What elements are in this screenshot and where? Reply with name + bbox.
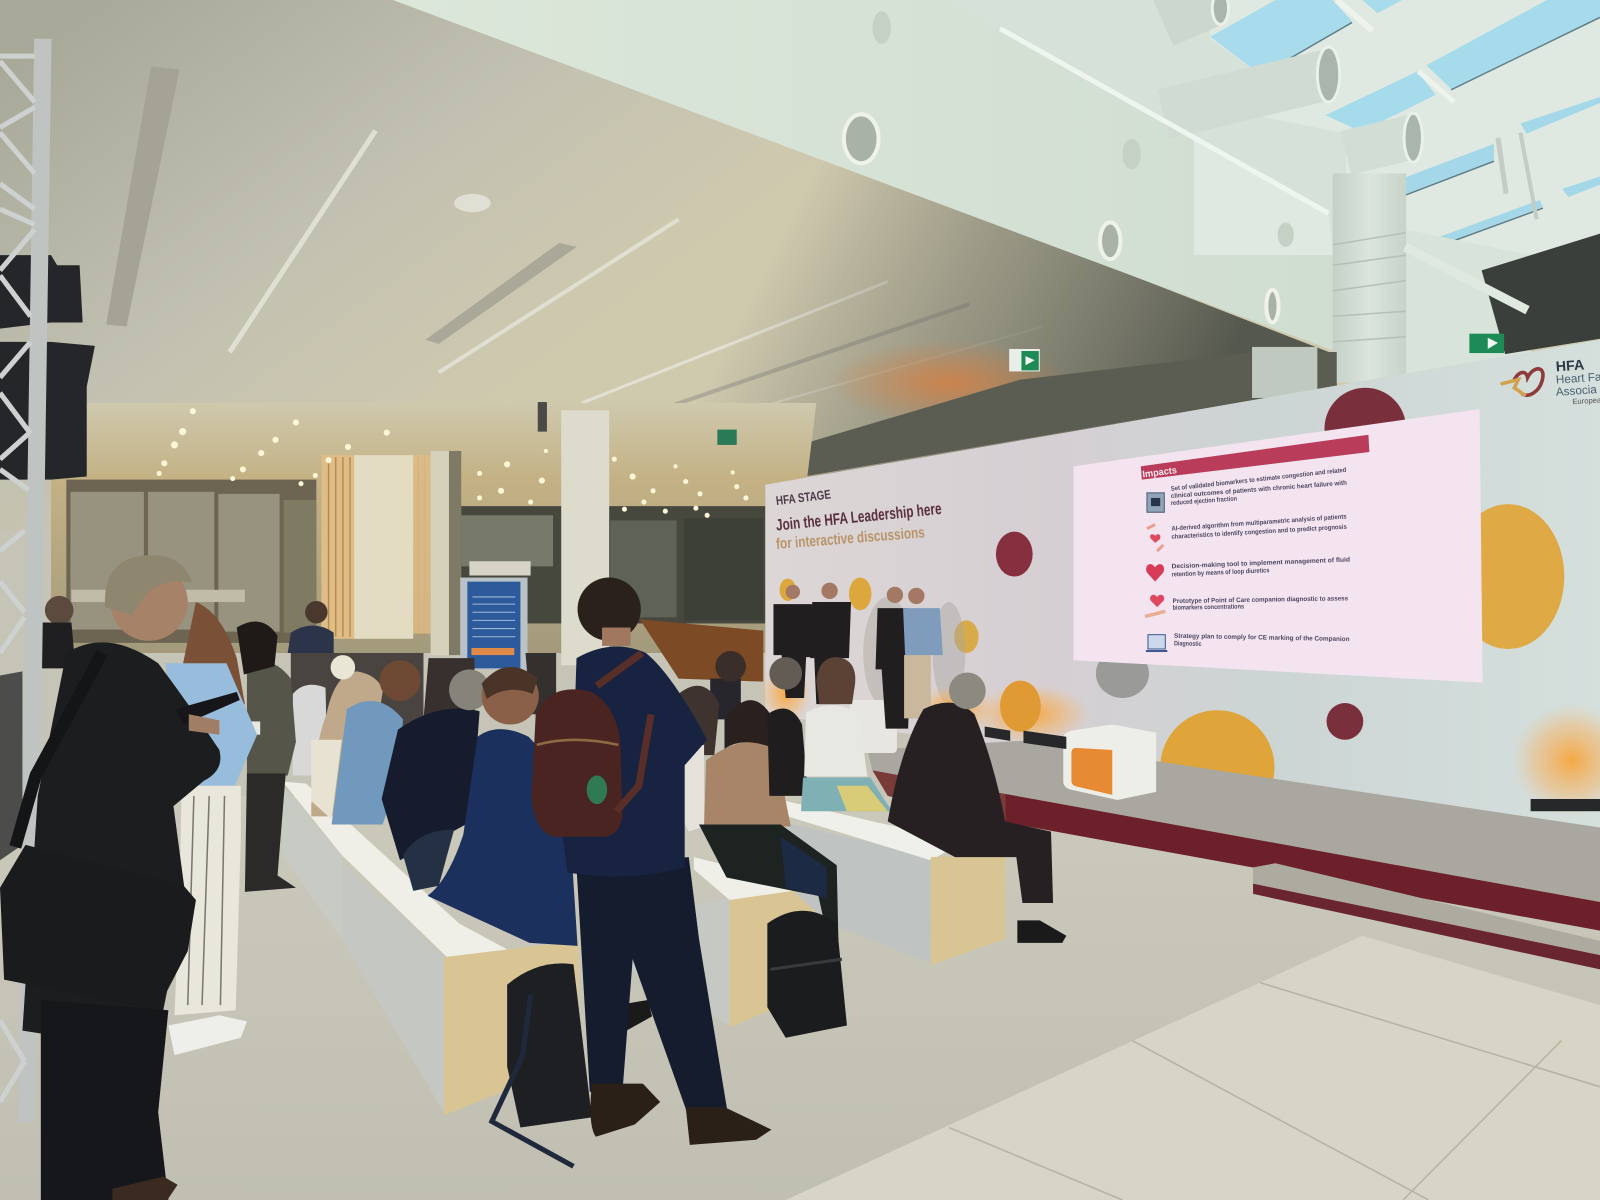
round column	[561, 410, 609, 665]
impacts header bar	[1141, 435, 1369, 480]
shoe	[112, 1177, 178, 1200]
right exit sign	[1469, 334, 1504, 353]
skylight glass and frames	[1194, 0, 1600, 255]
shaded soffit under beam	[571, 153, 1337, 480]
right-side wall and dark roof structure	[1405, 230, 1600, 388]
ventilation ducts	[939, 0, 1422, 383]
foreground man with shoulder bag	[0, 555, 240, 1200]
dark ceiling band above stage	[786, 352, 1337, 480]
head	[105, 555, 192, 641]
brown backpack	[532, 653, 651, 837]
bench 2 side	[628, 898, 730, 1026]
trousers	[577, 857, 728, 1117]
bench 3 wood end	[931, 855, 1005, 965]
bench 1 far side	[283, 786, 342, 940]
impact items text: reduced ejection fraction	[1171, 495, 1237, 507]
logo text	[1555, 357, 1600, 406]
backdrop heading text: for interactive discussions	[776, 524, 925, 553]
ceiling spot lights	[157, 408, 748, 518]
black suit jacket	[22, 642, 220, 1051]
blue info banner	[460, 578, 528, 669]
backdrop heading text: HFA STAGE	[775, 486, 832, 508]
standing woman blue shirt striped trousers	[165, 602, 257, 1055]
stage orange floor glow lights	[760, 663, 1600, 816]
shoes	[590, 1084, 771, 1145]
impact items text: biomarkers concentrations	[1173, 603, 1244, 612]
logo text: HFA	[1555, 357, 1585, 375]
left-edge patterned shirt figure	[0, 671, 22, 860]
seated man dark jacket	[382, 669, 490, 891]
impact items text: Prototype of Point of Care companion diagnostic to assess	[1173, 595, 1349, 605]
impact items text: clinical outcomes of patients with chronic heart failure with	[1171, 480, 1347, 500]
presenters on stage	[773, 583, 943, 729]
standing man with backpack	[532, 578, 771, 1145]
stage platform	[867, 741, 1600, 969]
standing woman grey jacket	[237, 622, 296, 892]
shoulder bag	[0, 653, 196, 1010]
white cube seat with orange opening	[1063, 724, 1156, 800]
seated man light blue shirt	[332, 660, 420, 824]
impact items text: Decision-making tool to implement management of fluid	[1171, 557, 1350, 570]
backpack on floor right	[767, 911, 847, 1038]
white cube seat rear	[850, 700, 897, 753]
impact items text: Diagnostic	[1174, 640, 1202, 648]
bench 2 wood end	[730, 886, 829, 1028]
logo text: Associa	[1555, 383, 1598, 399]
backdrop heading text: Join the HFA Leadership here	[775, 500, 942, 535]
lobby exit sign	[717, 430, 737, 445]
impacts heading: Impacts	[1142, 465, 1178, 481]
impact items text: AI-derived algorithm from multiparametric analysis of patients	[1171, 513, 1347, 533]
impact items text: Strategy plan to comply for CE marking of the Companion	[1174, 633, 1350, 643]
logo heart mark	[1502, 369, 1543, 395]
screen surface	[1073, 409, 1483, 683]
trousers	[41, 1000, 168, 1200]
seated audience	[41, 596, 1066, 957]
security camera	[538, 402, 547, 432]
icon: laptop	[1146, 635, 1167, 652]
truss structure at left	[0, 39, 43, 1122]
truss stage lights	[0, 255, 95, 480]
icon: hands and heart	[1147, 524, 1163, 551]
ceiling slot vents and light lines	[106, 66, 1043, 418]
lobby background	[51, 403, 816, 682]
impact items text: Set of validated biomarkers to estimate congestion and related	[1170, 467, 1347, 493]
bench 1 near side	[342, 862, 444, 1112]
floor	[0, 796, 1600, 1200]
background crowd	[41, 596, 746, 832]
HFA logo	[1502, 357, 1600, 406]
wall spot lamps	[872, 11, 1294, 247]
navy jacket	[559, 647, 707, 877]
bench 1 cushion	[283, 782, 510, 957]
backdrop heading text	[775, 486, 942, 553]
icon: safe box	[1147, 493, 1164, 512]
round wall vents	[844, 114, 1279, 322]
impact items text: retention by means of loop diuretics	[1171, 567, 1270, 579]
exit sign above stage	[1009, 349, 1040, 371]
seated man navy suit	[428, 667, 578, 946]
warm glow on ceiling	[827, 340, 1071, 426]
seated man black suit	[888, 672, 1066, 943]
icon: heart	[1146, 564, 1164, 582]
impact items text	[1170, 467, 1350, 648]
gold circle in glow	[1000, 681, 1041, 732]
bench 2 cushion	[694, 857, 829, 900]
benches	[283, 782, 1005, 1115]
smoke detector	[454, 194, 491, 212]
bench 3 side	[790, 823, 931, 963]
seated woman white top and patterned skirt	[801, 657, 893, 811]
stage light bars	[985, 727, 1600, 811]
seated woman black top	[767, 657, 808, 796]
floor light tiles	[786, 936, 1600, 1200]
hand and phone	[176, 692, 240, 735]
stage backdrop wall	[765, 340, 1600, 828]
impact items text: characteristics to identify congestion and to predict prognosis	[1171, 524, 1347, 541]
backdrop decorative circles	[780, 388, 1564, 779]
beam side face	[393, 0, 1337, 352]
seated woman beige top	[699, 700, 839, 957]
shoe by backpack	[617, 1000, 652, 1031]
concrete column behind stage	[1252, 347, 1317, 398]
ceiling soffit	[0, 0, 1600, 531]
bench 1 wood end	[444, 941, 579, 1115]
bench 3 cushion	[786, 801, 964, 860]
backpack on floor left	[492, 963, 592, 1166]
hair and head	[578, 578, 641, 646]
projection screen	[1073, 409, 1483, 683]
icon: heart on hand	[1145, 595, 1165, 616]
